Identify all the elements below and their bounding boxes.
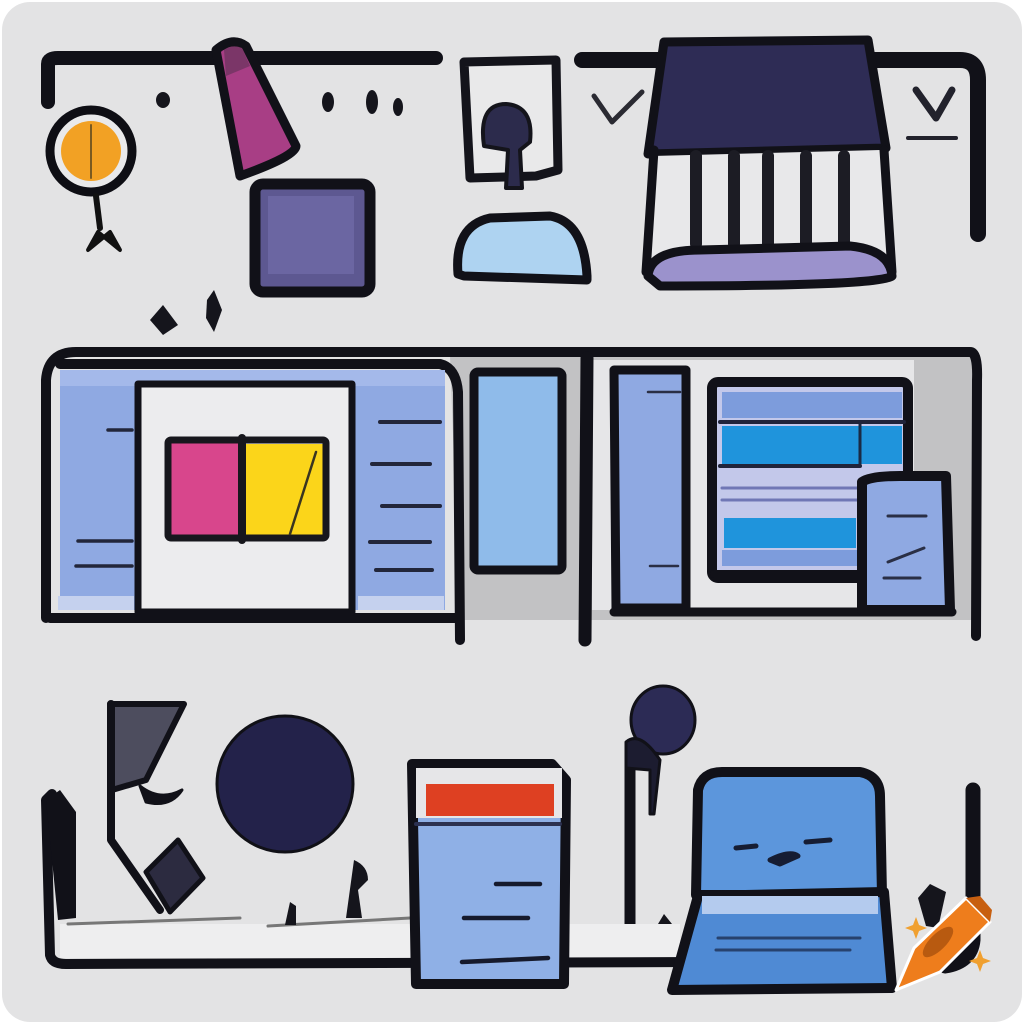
icon: orange circle pin [50, 110, 132, 250]
middle shelf gray backing [450, 356, 972, 620]
icon: picture frame with mushroom [464, 60, 558, 188]
icon: bottom left flag shapes [110, 704, 203, 912]
panel: book box with red band [412, 764, 566, 984]
panel: light blue door [474, 372, 562, 570]
icon: microphone stand [626, 686, 695, 948]
small marks on top shelf [150, 90, 403, 335]
icon: purple square [255, 184, 370, 292]
panel: small blue door [862, 476, 950, 610]
small marks on bottom shelf [285, 860, 946, 928]
icon: light blue pill [458, 216, 587, 280]
top shelf rail left [48, 58, 436, 102]
icon: dark awning cabinet [646, 40, 892, 286]
icon: purple tag [216, 42, 296, 176]
panel: left blue cabinet [50, 364, 460, 640]
icon: check mark right [908, 90, 956, 138]
panel: window with blue bars [712, 382, 908, 578]
icon: check mark left [594, 92, 642, 122]
bottom shelf [46, 790, 973, 966]
icon: dark circle [217, 716, 353, 852]
icon: pink and yellow box [168, 438, 326, 540]
middle shelf white opening right [592, 360, 914, 610]
divider post [585, 358, 587, 640]
middle shelf frame [46, 352, 977, 636]
icon: orange crayon logo [896, 896, 992, 990]
top shelf rail right [582, 60, 978, 234]
icon: laptop [672, 772, 892, 990]
shelf line right [614, 608, 952, 616]
panel: narrow blue door [614, 370, 686, 608]
